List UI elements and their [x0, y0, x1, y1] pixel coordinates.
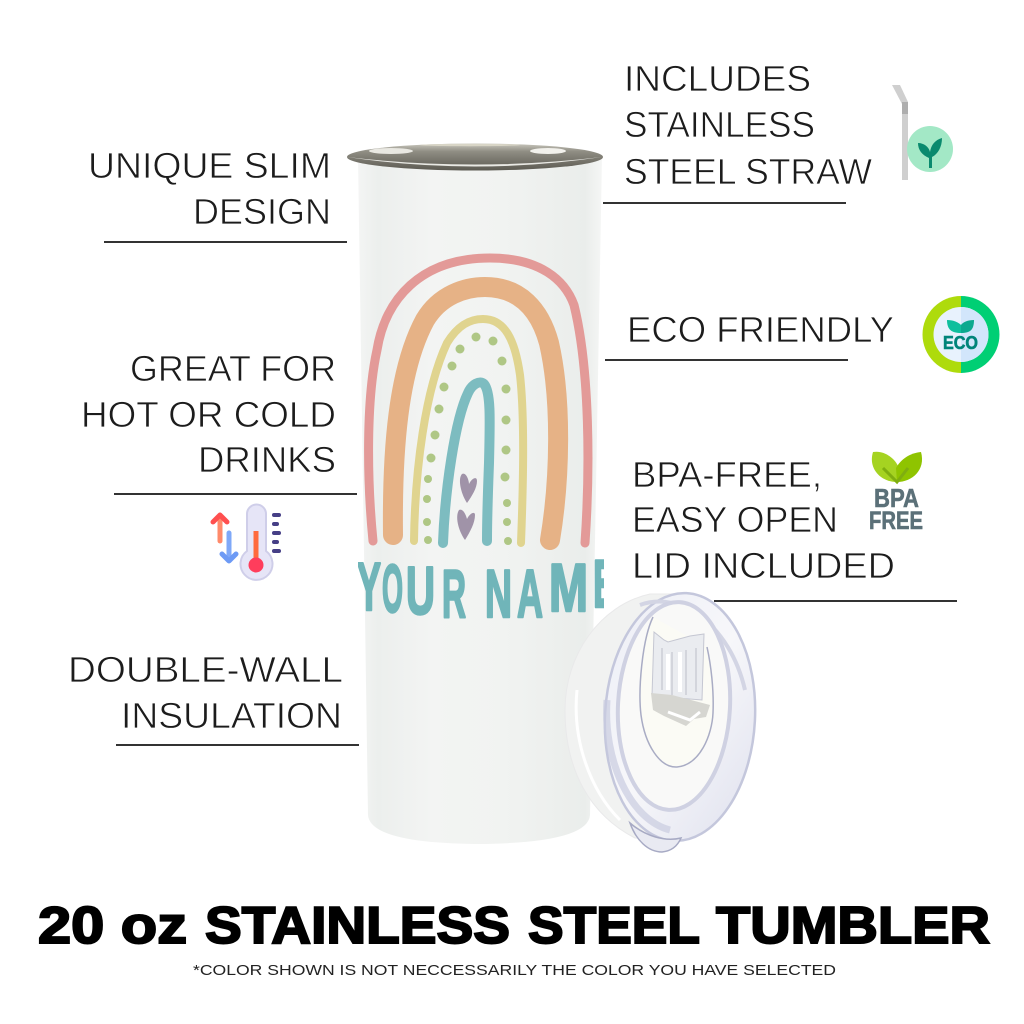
- teal arch: [443, 382, 490, 543]
- lid inner ring: [613, 599, 735, 813]
- title: 20 oz: [38, 897, 187, 955]
- title: [38, 897, 990, 955]
- YOUR NAME text: U: [406, 553, 435, 629]
- callout: hot or cold: GREAT FOR: [130, 348, 336, 389]
- orange arch: [393, 287, 558, 540]
- lid outer ring: [599, 589, 761, 845]
- rainbow design: [369, 258, 588, 545]
- icon: bpa free: [869, 452, 923, 535]
- callout: includes straw: STAINLESS: [624, 104, 815, 145]
- steel rim: [347, 144, 603, 170]
- lid bottom spout: [630, 823, 681, 852]
- callout: unique slim design: UNIQUE SLIM: [88, 145, 331, 186]
- YOUR NAME text: M: [549, 550, 588, 626]
- lid ring shading: [607, 700, 670, 830]
- footnote: *COLOR SHOWN IS NOT NECCESSARILY THE COLOR YOU HAVE SELECTED: [193, 962, 836, 979]
- YOUR NAME text: Y: [357, 549, 381, 625]
- hearts: [457, 474, 477, 540]
- icon: straw with sprout: [892, 85, 953, 180]
- YOUR NAME text: E: [593, 546, 617, 622]
- tumbler body: [358, 157, 602, 844]
- callout: bpa-free lid: EASY OPEN: [632, 499, 838, 540]
- callout: includes straw: INCLUDES: [624, 58, 811, 99]
- callout: bpa-free lid: BPA-FREE,: [632, 454, 822, 495]
- title: STEEL: [528, 897, 700, 955]
- callout: double-wall insulation: [68, 649, 359, 746]
- YOUR NAME text: R: [442, 556, 466, 632]
- callout: hot or cold: HOT OR COLD: [81, 394, 336, 435]
- yellow arch: [414, 319, 523, 543]
- YOUR NAME text: [358, 559, 604, 618]
- icon: eco badge: ECO: [943, 333, 978, 353]
- lid slider tab: [651, 632, 710, 726]
- YOUR NAME text: N: [485, 556, 512, 632]
- callout: hot or cold: DRINKS: [198, 439, 336, 480]
- tumbler: [347, 144, 617, 844]
- lid: [565, 589, 761, 852]
- callout: bpa-free lid: [632, 454, 957, 602]
- icon: bpa free: FREE: [869, 507, 923, 535]
- pink arch: [369, 258, 588, 543]
- YOUR NAME text: A: [517, 556, 543, 632]
- icon: thermometer: [213, 504, 281, 580]
- callout: includes straw: STEEL STRAW: [624, 151, 872, 192]
- lid side wall: [565, 594, 680, 840]
- YOUR NAME text: O: [382, 551, 403, 627]
- green dots: [423, 332, 512, 545]
- callout: includes straw: [603, 58, 872, 204]
- callout: double-wall insulation: DOUBLE-WALL: [68, 649, 343, 690]
- title: TUMBLER: [716, 897, 990, 955]
- callout: unique slim design: [88, 145, 347, 243]
- callout: bpa-free lid: LID INCLUDED: [632, 545, 895, 586]
- callout: eco friendly: ECO FRIENDLY: [627, 309, 894, 350]
- icon: eco badge: [922, 296, 1000, 373]
- title: STAINLESS: [205, 897, 510, 955]
- callout: unique slim design: DESIGN: [193, 191, 331, 232]
- callout: double-wall insulation: INSULATION: [121, 695, 342, 736]
- lid slider recess: [640, 617, 713, 767]
- callout: hot or cold: [81, 348, 357, 495]
- icon: bpa free: BPA: [874, 483, 919, 513]
